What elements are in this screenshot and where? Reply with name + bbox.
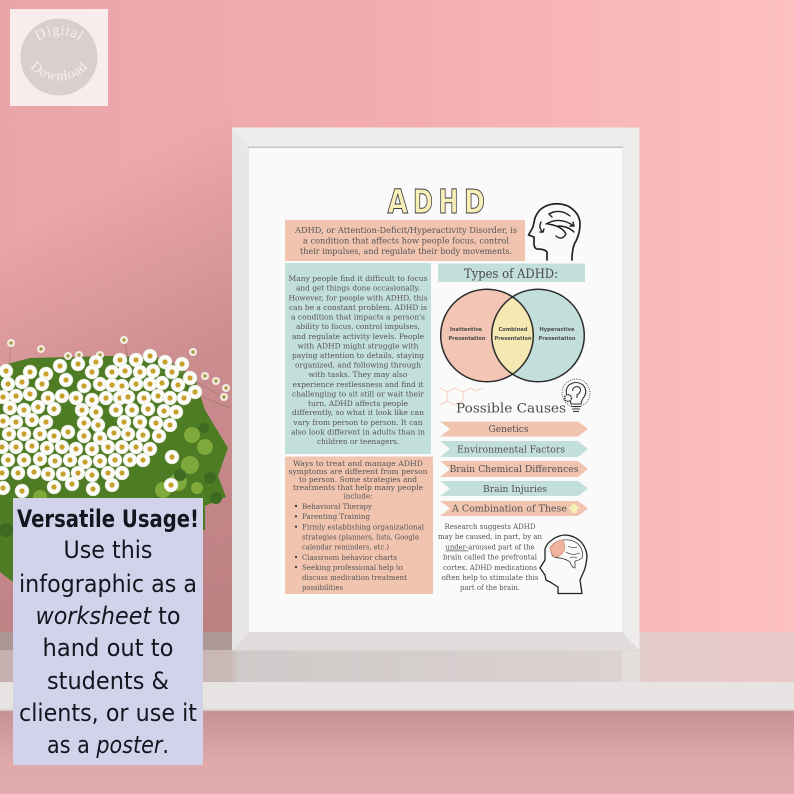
panel: what is ADHD: also look different in adults than in — [291, 428, 425, 436]
icon: head with swirling arrows — [528, 204, 580, 260]
panel: what is ADHD: organized, and following through — [295, 361, 421, 370]
causes: arrow list: Genetics — [488, 424, 529, 435]
panel: what is ADHD: vary from person to person. It can — [292, 418, 423, 427]
causes: arrow list: A Combination of These — [451, 504, 567, 514]
panel: what is ADHD: with tasks. They may also — [308, 370, 408, 379]
panel: treatment: to person. Some strategies and — [299, 475, 417, 484]
panel: what is ADHD: However, for people with ADHD, this — [288, 293, 428, 302]
causes: arrow list: Brain Injuries — [483, 484, 547, 495]
panel: what is ADHD: ability to focus, control impulses, — [296, 322, 420, 331]
venn diagram: Combined — [498, 327, 528, 333]
panel: what is ADHD: a condition that impacts a person's — [291, 313, 425, 322]
panel: what is ADHD: experience restlessness and find it — [292, 380, 424, 389]
title: D — [413, 182, 433, 221]
panel: treatment — [285, 456, 433, 594]
picture frame — [232, 128, 640, 650]
venn diagram: Inattentive — [450, 327, 482, 333]
venn diagram: Hyperactive — [540, 327, 575, 333]
text block: research note: under-aroused part of the — [446, 542, 534, 552]
panel: treatment: strategies (planners, lists, Google — [302, 532, 419, 541]
panel: what is ADHD: and regulate activity levels. People — [292, 332, 424, 341]
panel: treatment: symptoms are different from person — [288, 467, 428, 476]
text block: research note: part of the brain. — [460, 583, 520, 592]
heading: types of ADHD — [438, 264, 585, 282]
panel: what is ADHD: Many people find it difficult to focus — [288, 274, 428, 283]
panel: what is ADHD: paying attention to details, staying — [292, 351, 424, 360]
panel: treatment: Firmly establishing organizational — [302, 522, 425, 531]
callout: versatile usage: hand out to — [42, 634, 174, 662]
icon: faint dopamine molecule — [440, 388, 483, 405]
causes: arrow list — [440, 422, 588, 516]
panel: what is ADHD: and get things done occasionally. — [296, 284, 420, 293]
text block: research note: often help to stimulate this — [442, 573, 539, 582]
venn diagram: Presentation — [494, 336, 532, 342]
panel: definition — [285, 220, 525, 261]
venn diagram: Presentation — [448, 336, 486, 342]
panel: definition: a condition that affects how people focus, control — [303, 236, 509, 246]
panel: treatment: Behavioral Therapy — [302, 502, 373, 511]
panel: treatment: calendar reminders, etc.) — [302, 543, 389, 552]
panel: treatment: possibilities — [302, 583, 343, 592]
badge: digital download: Download — [30, 60, 88, 80]
panel: definition: ADHD, or Attention-Deficit/Hyperactivity Disorder, is — [294, 226, 517, 236]
panel: what is ADHD — [285, 263, 431, 454]
text block: research note: Research suggests ADHD — [444, 522, 536, 531]
panel: treatment: discuss medication treatment — [302, 573, 407, 582]
icon: light bulb with question mark — [562, 379, 590, 412]
panel: treatment: Ways to treat and manage ADHD — [293, 459, 423, 468]
panel: what is ADHD: challenging to sit still or wait their — [292, 389, 424, 398]
title: A — [388, 182, 408, 221]
panel: definition: their impulses, and regulate their body movements. — [300, 247, 512, 257]
title — [388, 182, 485, 221]
shelf — [0, 632, 794, 711]
callout: versatile usage: clients, or use it — [19, 699, 197, 727]
text block: research note — [438, 522, 542, 592]
panel: what is ADHD: turn. ADHD affects people — [308, 399, 408, 408]
panel: treatment: Classroom behavior charts — [302, 553, 397, 562]
plant: white daisies — [0, 336, 230, 582]
panel: treatment: treatments that help many people — [293, 483, 423, 492]
causes: arrow list: Environmental Factors — [457, 444, 565, 455]
callout: versatile usage: worksheet to — [36, 602, 180, 630]
panel: what is ADHD: differently, so what it look like can — [292, 408, 424, 417]
venn diagram: Presentation — [538, 336, 576, 342]
text block: research note: may be caused, in part, by an — [438, 532, 542, 541]
panel: treatment: include: — [344, 491, 372, 500]
causes: arrow list: Brain Chemical Differences — [450, 464, 579, 475]
callout: versatile usage — [13, 498, 203, 765]
badge: digital download — [10, 9, 108, 106]
venn diagram — [441, 289, 584, 382]
callout: versatile usage: students & — [47, 667, 169, 695]
title: H — [438, 182, 458, 221]
heading: types of ADHD: Types of ADHD: — [464, 267, 558, 282]
callout: versatile usage: Use this — [64, 536, 152, 564]
icon: head with brain and highlighted prefrontal cortex — [540, 535, 587, 594]
panel: what is ADHD: with ADHD might struggle with — [298, 341, 419, 350]
panel: what is ADHD: can be a constant problem. ADHD is — [289, 303, 427, 312]
heading: possible causes: Possible Causes — [456, 402, 566, 417]
panel: treatment: Parenting Training — [302, 512, 370, 521]
callout: versatile usage: as a poster. — [47, 731, 169, 759]
callout: versatile usage: Versatile Usage! — [17, 505, 199, 533]
callout: versatile usage: infographic as a — [19, 570, 197, 598]
panel: treatment: Seeking professional help to — [302, 563, 404, 572]
title: D — [464, 182, 485, 221]
badge: digital download: Digital — [34, 25, 84, 40]
text block: research note: brain called the prefrontal — [443, 553, 538, 562]
text block: research note: cortex. ADHD medications — [443, 563, 537, 572]
panel: what is ADHD: children or teenagers. — [317, 437, 399, 446]
